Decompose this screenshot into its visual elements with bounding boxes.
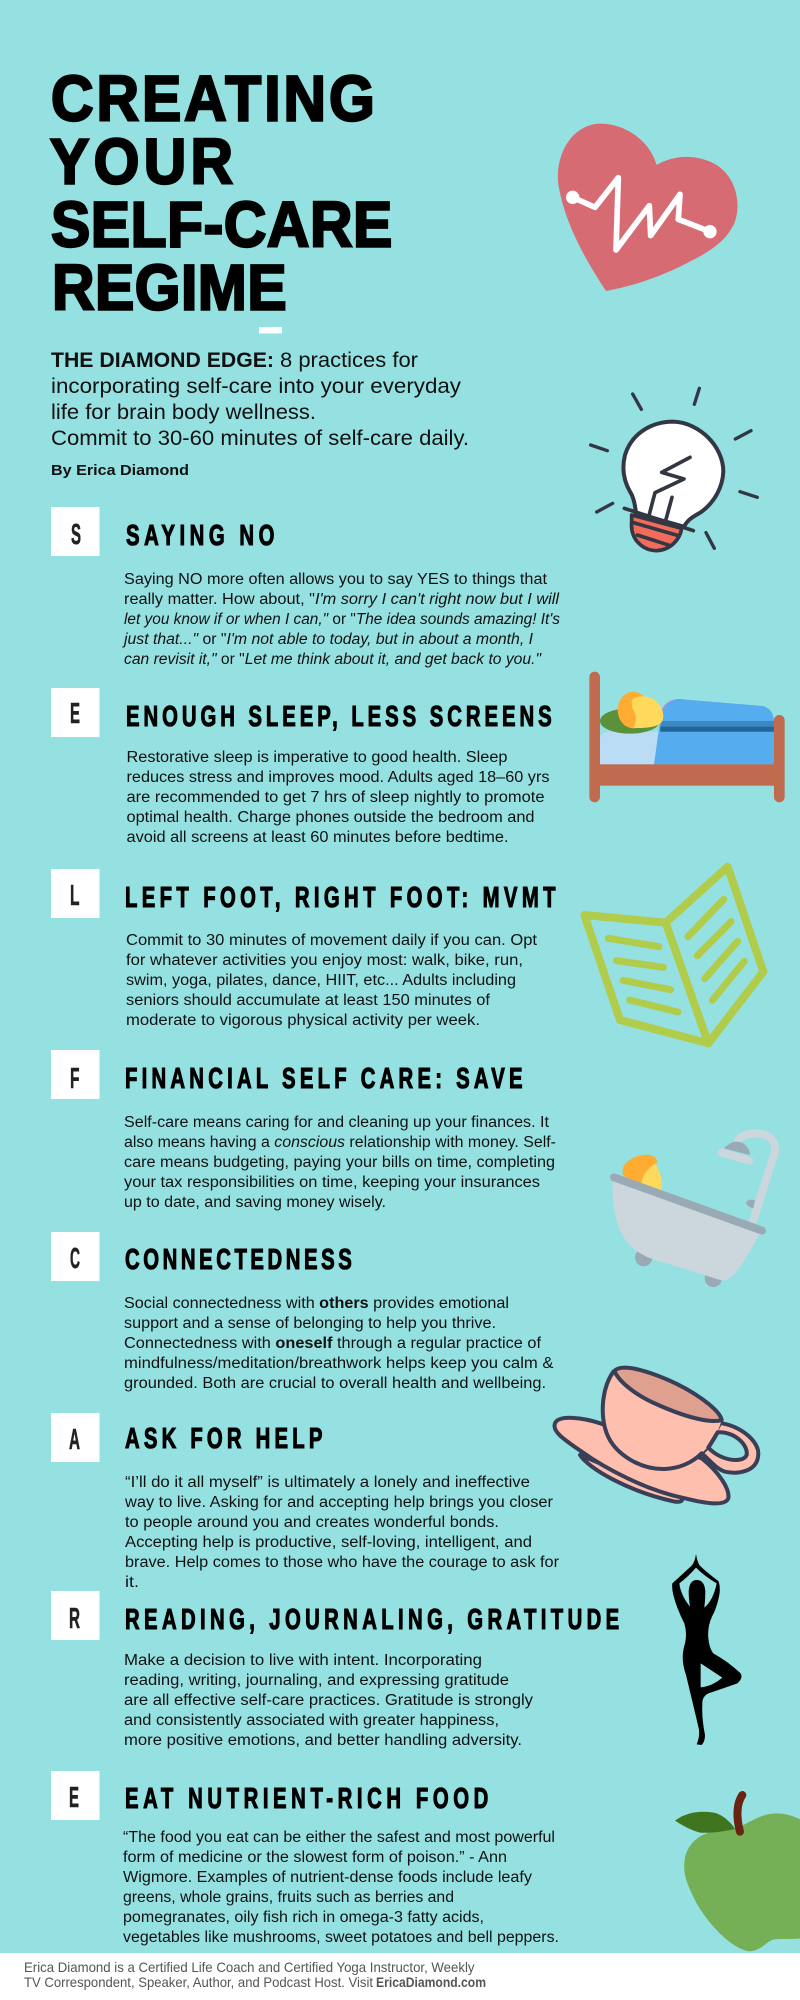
- letter tile C: C: [70, 1243, 80, 1275]
- letter tile E: E: [69, 1782, 79, 1814]
- body text: to people around you and creates wonderful bonds.: [125, 1514, 499, 1531]
- body text: reduces stress and improves mood. Adults aged 18–60 yrs: [126, 769, 550, 786]
- body text: [122, 571, 560, 668]
- icon: green apple: [675, 1795, 800, 1951]
- heading: LEFT FOOT, RIGHT FOOT: MVMT: [125, 882, 556, 914]
- intro text: Commit to 30-60 minutes of self-care daily.: [51, 427, 469, 450]
- intro text: 8 practices for: [280, 349, 418, 372]
- footer band: Erica Diamond is a Certified Life Coach and Certified Yoga Instructor, Weekly: [24, 1959, 474, 1975]
- body text: and consistently associated with greater happiness,: [124, 1712, 499, 1729]
- body text: really matter. How about, " I'm sorry I can't right now but I will: [124, 591, 560, 608]
- letter tile R: R: [69, 1603, 80, 1635]
- body text: support and a sense of belonging to help you thrive.: [124, 1315, 496, 1332]
- letter tile E: E: [70, 698, 80, 730]
- body text: reading, writing, journaling, and expressing gratitude: [124, 1672, 509, 1689]
- intro text: life for brain body wellness.: [51, 401, 316, 424]
- body text: Connectedness with oneself through a regular practice of: [124, 1335, 542, 1352]
- heading: FINANCIAL SELF CARE: SAVE: [125, 1063, 523, 1095]
- intro text: THE DIAMOND EDGE:: [51, 349, 274, 372]
- body text: Social connectedness with others provides emotional: [124, 1295, 509, 1312]
- body text: [126, 932, 538, 1029]
- body text: also means having a conscious relationship with money. Self-: [124, 1134, 556, 1151]
- section A: ask for help: [51, 1413, 559, 1591]
- white dash accent: [259, 327, 282, 334]
- body text: your tax responsibilities on time, keeping your insurances: [124, 1174, 540, 1191]
- icon: teacup and saucer: [554, 1368, 758, 1503]
- body text: brave. Help comes to those who have the courage to ask for: [125, 1554, 559, 1571]
- heading: SAYING NO: [126, 520, 274, 552]
- body text: seniors should accumulate at least 150 minutes of: [126, 992, 491, 1009]
- body text: greens, whole grains, fruits such as berries and: [123, 1889, 454, 1906]
- body text: [123, 1829, 559, 1946]
- body text: are all effective self-care practices. Gratitude is strongly: [124, 1692, 533, 1709]
- body text: up to date, and saving money wisely.: [124, 1194, 386, 1211]
- body text: care means budgeting, paying your bills on time, completing: [124, 1154, 555, 1171]
- section E: enough sleep: [51, 688, 552, 846]
- body text: optimal health. Charge phones outside the bedroom and: [126, 809, 534, 826]
- body text: are recommended to get 7 hrs of sleep nightly to promote: [126, 789, 544, 806]
- letter tile A: A: [69, 1424, 80, 1456]
- footer band: [0, 1953, 800, 2000]
- body text: vegetables like mushrooms, sweet potatoes and bell peppers.: [123, 1929, 559, 1946]
- letter tile S: S: [71, 519, 81, 551]
- body text: form of medicine or the slowest form of poison.” - Ann: [123, 1849, 507, 1866]
- byline: By Erica Diamond: [51, 462, 189, 479]
- title: [50, 63, 392, 324]
- heading: EAT NUTRIENT-RICH FOOD: [125, 1783, 488, 1815]
- body text: just that..." or "I'm not able to today, but in about a month, I: [122, 631, 534, 648]
- section F: financial self care: [51, 1050, 556, 1211]
- body text: [124, 1474, 559, 1591]
- letter tile C: [51, 1232, 100, 1281]
- body text: Commit to 30 minutes of movement daily if you can. Opt: [126, 932, 538, 949]
- body text: “The food you eat can be either the safest and most powerful: [123, 1829, 555, 1846]
- icon: yoga tree pose: [672, 1554, 741, 1745]
- heading: READING, JOURNALING, GRATITUDE: [125, 1604, 619, 1636]
- body text: Self-care means caring for and cleaning up your finances. It: [124, 1114, 550, 1131]
- section E: eat nutrient-rich food: [51, 1771, 559, 1946]
- body text: for whatever activities you enjoy most: walk, bike, run,: [126, 952, 523, 969]
- body text: [124, 1114, 556, 1211]
- title: SELF-CARE: [51, 189, 392, 261]
- title: REGIME: [52, 252, 287, 324]
- body text: way to live. Asking for and accepting help brings you closer: [124, 1494, 553, 1511]
- body text: moderate to vigorous physical activity per week.: [126, 1012, 480, 1029]
- body text: Restorative sleep is imperative to good health. Sleep: [126, 749, 508, 766]
- title: YOUR: [50, 126, 233, 198]
- letter tile R: [51, 1591, 100, 1640]
- section C: connectedness: [51, 1232, 554, 1392]
- body text: Accepting help is productive, self-loving, intelligent, and: [125, 1534, 532, 1551]
- heading: ENOUGH SLEEP, LESS SCREENS: [126, 701, 552, 733]
- intro text: incorporating self-care into your everyday: [51, 375, 462, 398]
- body text: [126, 749, 550, 846]
- title: CREATING: [51, 63, 375, 135]
- heading: CONNECTEDNESS: [125, 1244, 352, 1276]
- letter tile F: F: [70, 1063, 80, 1095]
- icon: open book: [584, 867, 763, 1043]
- icon: light bulb: [591, 388, 757, 551]
- body text: more positive emotions, and better handling adversity.: [124, 1732, 522, 1749]
- body text: avoid all screens at least 60 minutes before bedtime.: [126, 829, 508, 846]
- letter tile E: [51, 688, 100, 737]
- section S: saying no: [51, 507, 560, 668]
- body text: [124, 1295, 554, 1392]
- body text: Saying NO more often allows you to say YES to things that: [124, 571, 548, 588]
- body text: let you know if or when I can," or "The idea sounds amazing! It's: [124, 611, 560, 628]
- letter tile L: L: [70, 880, 80, 912]
- body text: grounded. Both are crucial to overall health and wellbeing.: [124, 1375, 546, 1392]
- letter tile F: [51, 1050, 100, 1099]
- body text: [124, 1652, 533, 1749]
- body text: can revisit it," or "Let me think about it, and get back to you.": [124, 651, 543, 668]
- body text: it.: [125, 1574, 139, 1591]
- body text: mindfulness/meditation/breathwork helps keep you calm &: [124, 1355, 554, 1372]
- icon: bed: [589, 672, 785, 802]
- heading: ASK FOR HELP: [125, 1423, 322, 1455]
- footer band: TV Correspondent, Speaker, Author, and Podcast Host. Visit: [24, 1974, 373, 1990]
- letter tile S: [51, 507, 100, 556]
- body text: Make a decision to live with intent. Incorporating: [124, 1652, 482, 1669]
- footer band: EricaDiamond.com: [376, 1974, 486, 1990]
- icon: bathtub: [613, 1133, 775, 1287]
- body text: “I’ll do it all myself” is ultimately a lonely and ineffective: [125, 1474, 530, 1491]
- letter tile L: [51, 869, 100, 918]
- icon: heart with pulse: [558, 124, 738, 291]
- section L: left foot: [51, 869, 556, 1029]
- body text: swim, yoga, pilates, dance, HIIT, etc... Adults including: [126, 972, 516, 989]
- body text: Wigmore. Examples of nutrient-dense foods include leafy: [123, 1869, 532, 1886]
- body text: pomegranates, oily fish rich in omega-3 fatty acids,: [123, 1909, 484, 1926]
- letter tile A: [51, 1413, 100, 1462]
- intro text: [51, 349, 469, 450]
- letter tile E: [51, 1771, 100, 1820]
- section R: reading: [51, 1591, 619, 1749]
